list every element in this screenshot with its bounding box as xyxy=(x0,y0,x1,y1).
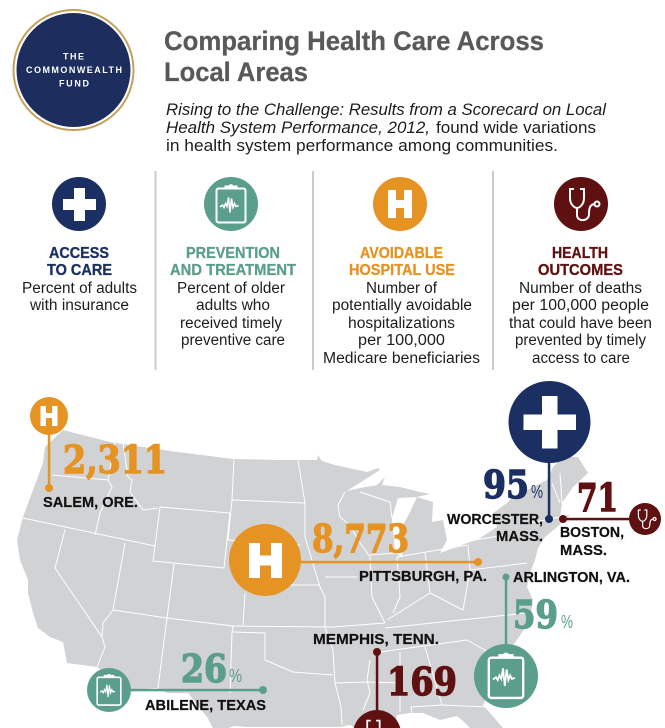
value: 95%: % xyxy=(531,482,543,502)
description: health outcomes: access to care xyxy=(532,350,630,367)
description: health outcomes: prevented by timely xyxy=(515,332,646,349)
panel: access to care xyxy=(22,177,137,314)
description: health outcomes: per 100,000 people xyxy=(512,297,649,314)
heading: access to care: TO CARE xyxy=(47,262,112,279)
icon: stethoscope cropped xyxy=(353,710,401,728)
logo: The Commonwealth Fund xyxy=(14,10,134,130)
description: avoidable hospital use: potentially avoidable xyxy=(332,297,472,314)
icon: clipboard xyxy=(204,177,258,231)
intro text: Rising to the Challenge: Results from a Scorecard on Local xyxy=(166,101,607,119)
icon: hospital H small xyxy=(30,397,68,435)
logo: The Commonwealth Fund: COMMONWEALTH xyxy=(26,65,122,75)
heading: avoidable hospital use: HOSPITAL USE xyxy=(349,262,455,279)
value: 8,773: 8,773 xyxy=(312,516,409,561)
description: prevention and treatment: Percent of older xyxy=(177,280,285,297)
value: 26%: % xyxy=(229,666,242,686)
heading: access to care xyxy=(47,245,112,279)
intro text: in health system performance among communities. xyxy=(166,137,558,155)
heading: avoidable hospital use: AVOIDABLE xyxy=(360,245,443,262)
description: access to care: with insurance xyxy=(29,297,129,314)
value: 26%: 26 xyxy=(181,646,227,691)
callout: Worcester, Mass. xyxy=(447,381,590,545)
icon: hospital H xyxy=(373,177,427,231)
value: 169: 169 xyxy=(387,659,457,704)
icon: clipboard small xyxy=(87,668,131,712)
description: prevention and treatment: adults who xyxy=(196,297,270,314)
title: Comparing Health Care Across xyxy=(164,26,544,56)
panel: avoidable hospital use xyxy=(323,177,480,367)
label: Pittsburgh: PITTSBURGH, PA. xyxy=(359,569,487,585)
title xyxy=(164,26,544,87)
icon: clipboard large xyxy=(474,644,538,708)
heading: health outcomes xyxy=(538,245,623,279)
callout: Salem, Ore. xyxy=(30,397,167,511)
description: health outcomes: Number of deaths xyxy=(519,280,642,297)
heading: avoidable hospital use xyxy=(349,245,455,279)
value: 71: 71 xyxy=(577,475,618,520)
heading: prevention and treatment: PREVENTION xyxy=(186,245,280,262)
description: avoidable hospital use: Number of xyxy=(366,280,438,297)
label: Boston xyxy=(560,525,624,559)
heading: prevention and treatment: AND TREATMENT xyxy=(170,262,297,279)
callout: Arlington, Va. xyxy=(474,570,630,708)
label: Worcester: WORCESTER, xyxy=(447,512,543,528)
icon: hospital H large xyxy=(229,524,301,596)
heading: health outcomes: OUTCOMES xyxy=(538,262,623,279)
description: prevention and treatment xyxy=(177,280,285,349)
description: prevention and treatment: received timely xyxy=(180,315,282,332)
value: 59%: % xyxy=(561,612,573,632)
description: avoidable hospital use: per 100,000 xyxy=(358,332,445,349)
intro text xyxy=(166,101,607,155)
icon: medical cross large xyxy=(508,381,590,463)
heading: access to care: ACCESS xyxy=(49,245,109,262)
label: Boston: MASS. xyxy=(560,543,607,559)
map: United States xyxy=(17,430,588,728)
intro text: found wide variations xyxy=(436,119,596,137)
intro text: Health System Performance, 2012, xyxy=(166,119,430,137)
description: access to care xyxy=(22,280,137,314)
description: access to care: Percent of adults xyxy=(22,280,137,297)
description: avoidable hospital use: hospitalizations xyxy=(348,315,455,332)
heading: health outcomes: HEALTH xyxy=(552,245,608,262)
description: avoidable hospital use: Medicare beneficiaries xyxy=(323,350,480,367)
description: health outcomes: that could have been xyxy=(509,315,652,332)
label: Boston: BOSTON, xyxy=(560,525,624,541)
label: Arlington: ARLINGTON, VA. xyxy=(513,570,630,586)
callout: Boston, Mass. xyxy=(559,475,661,559)
icon: stethoscope small xyxy=(629,503,661,535)
value: 2,311: 2,311 xyxy=(63,437,167,482)
label: Memphis: MEMPHIS, TENN. xyxy=(313,632,439,648)
description: prevention and treatment: preventive care xyxy=(181,332,285,349)
label: Worcester xyxy=(447,512,543,545)
panel: prevention and treatment xyxy=(170,177,297,349)
label: Worcester: MASS. xyxy=(496,529,543,545)
logo: The Commonwealth Fund: THE xyxy=(63,52,84,62)
icon: medical cross xyxy=(52,177,106,231)
heading: prevention and treatment xyxy=(170,245,297,279)
label: Salem: SALEM, ORE. xyxy=(43,495,138,511)
label: Abilene: ABILENE, TEXAS xyxy=(145,698,266,714)
value: 95%: 95 xyxy=(483,462,529,507)
callout: Memphis, Tenn. xyxy=(313,632,457,728)
panel: health outcomes xyxy=(509,177,652,367)
callout: Abilene, Texas xyxy=(87,646,267,714)
description: avoidable hospital use xyxy=(323,280,480,367)
logo: The Commonwealth Fund: FUND xyxy=(59,78,90,88)
value: 59%: 59 xyxy=(513,592,558,637)
description: health outcomes xyxy=(509,280,652,367)
icon: stethoscope xyxy=(554,177,608,231)
title: Local Areas xyxy=(164,57,308,87)
callout: Pittsburgh, Pa. xyxy=(229,516,487,596)
